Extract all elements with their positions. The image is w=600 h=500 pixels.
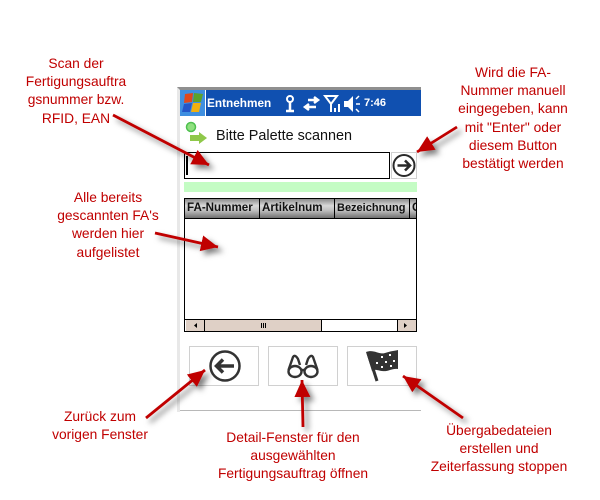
status icons bbox=[286, 95, 360, 112]
label: details: Detail-Fenster für den bbox=[226, 430, 360, 445]
details button bbox=[268, 346, 338, 386]
label: manual entry: Nummer manuell bbox=[460, 83, 566, 98]
arrow: back bbox=[146, 370, 205, 418]
label: scan: Scan der bbox=[48, 56, 104, 71]
label: details bbox=[218, 430, 368, 481]
label: finish bbox=[431, 423, 567, 474]
label: manual entry: eingegeben, kann bbox=[458, 101, 568, 116]
label: list bbox=[57, 190, 159, 260]
label: back: Zurück zum bbox=[64, 409, 136, 424]
label: details: Fertigungsauftrag öffnen bbox=[218, 466, 368, 481]
clock: 7:46 bbox=[364, 97, 386, 109]
label: details: ausgewählten bbox=[250, 448, 336, 463]
label: manual entry bbox=[458, 65, 568, 171]
label: scan: Fertigungsauftra bbox=[26, 74, 126, 89]
label: list: gescannten FA's bbox=[57, 208, 159, 223]
back button bbox=[189, 346, 259, 386]
arrow: list bbox=[155, 233, 218, 247]
label: manual entry: diesem Button bbox=[469, 138, 557, 153]
label: scan: gsnummer bzw. bbox=[28, 92, 124, 107]
label: scan bbox=[26, 56, 126, 126]
arrow: scan bbox=[113, 115, 209, 165]
arrow: finish bbox=[403, 376, 463, 418]
table bbox=[184, 198, 417, 332]
label: finish: Zeiterfassung stoppen bbox=[431, 459, 567, 474]
bottom rule bbox=[180, 410, 421, 411]
label: back bbox=[52, 409, 148, 442]
scrollbar bbox=[185, 319, 416, 331]
label: manual entry: mit "Enter" oder bbox=[465, 120, 561, 135]
input field bbox=[184, 152, 390, 179]
confirm button bbox=[391, 152, 417, 179]
title bar bbox=[180, 90, 421, 116]
label: list: Alle bereits bbox=[74, 190, 142, 205]
prompt text: Bitte Palette scannen bbox=[216, 128, 352, 144]
title text: Entnehmen bbox=[207, 96, 271, 110]
label: finish: erstellen und bbox=[459, 441, 538, 456]
arrow: confirm bbox=[417, 127, 457, 152]
table header: Artikelnum bbox=[262, 201, 323, 214]
icon: windows start bbox=[180, 90, 206, 116]
label: scan: RFID, EAN bbox=[42, 111, 110, 126]
label: list: aufgelistet bbox=[77, 245, 139, 260]
label: back: vorigen Fenster bbox=[52, 427, 148, 442]
status bar green bbox=[184, 182, 417, 192]
arrow: details bbox=[302, 380, 303, 427]
phone screen bbox=[177, 87, 421, 412]
label: manual entry: bestätigt werden bbox=[462, 156, 564, 171]
table header: FA-Nummer bbox=[187, 201, 253, 214]
table header: Bezeichnung bbox=[337, 202, 405, 214]
table header bbox=[185, 199, 416, 219]
icon: status arrow bbox=[186, 122, 207, 144]
label: list: werden hier bbox=[72, 226, 144, 241]
finish flag button bbox=[347, 346, 417, 386]
label: finish: Übergabedateien bbox=[446, 423, 552, 438]
label: manual entry: Wird die FA- bbox=[475, 65, 551, 80]
